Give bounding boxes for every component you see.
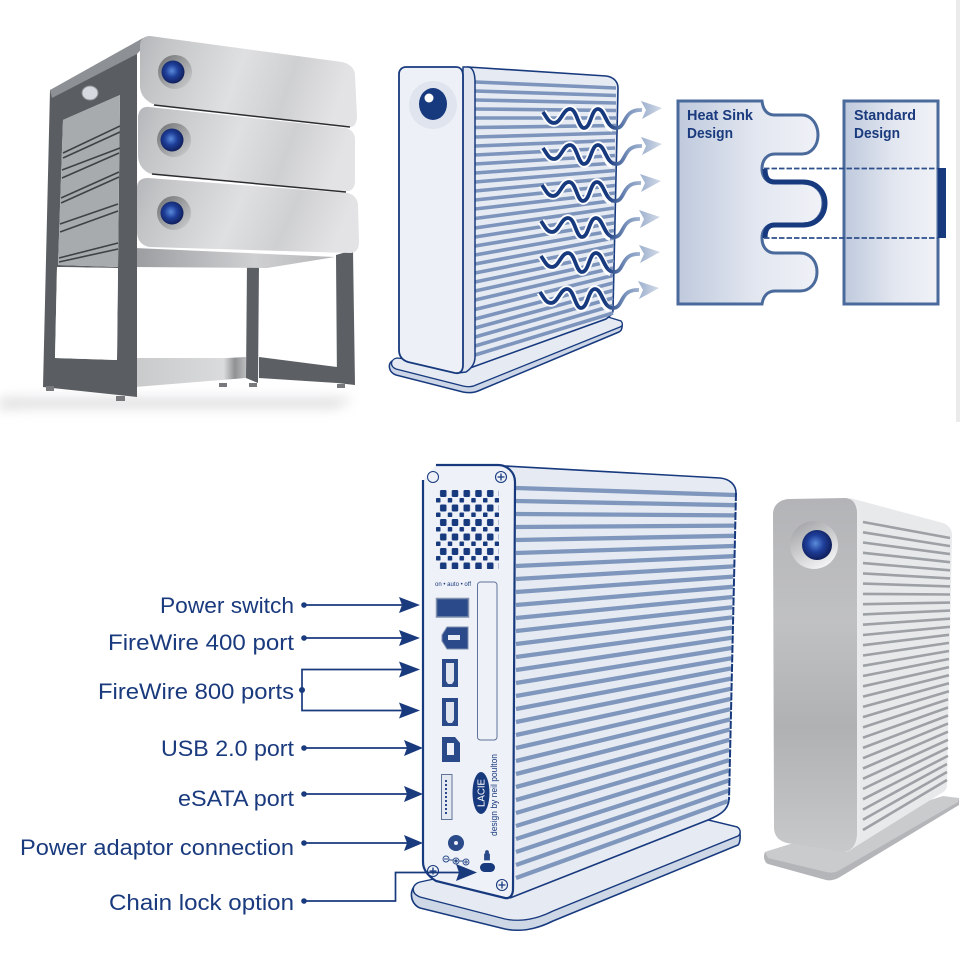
frame feet — [46, 383, 345, 401]
shoulder highlight — [845, 498, 861, 852]
middle drive — [138, 107, 355, 191]
standard design contact bar — [938, 168, 946, 238]
bottom drive — [137, 178, 359, 253]
label: FireWire 400 port — [108, 630, 420, 655]
label: eSATA port — [178, 786, 423, 811]
dashed guide lines — [764, 168, 938, 238]
polarity symbol — [443, 856, 469, 865]
power adaptor socket — [448, 835, 464, 851]
side outline — [505, 466, 736, 493]
base plate top — [765, 796, 959, 873]
standard design label: Standard — [854, 108, 916, 124]
fins — [475, 82, 616, 355]
label: power adaptor connection — [20, 835, 423, 860]
label: USB 2.0 port: USB 2.0 port — [161, 736, 295, 761]
front LED knob — [409, 81, 457, 129]
bottom knob — [157, 196, 191, 230]
front face — [399, 67, 463, 373]
top drive — [140, 36, 357, 127]
expansion slot cover — [478, 582, 497, 740]
bottom right screw — [496, 880, 508, 890]
base plate — [411, 820, 740, 930]
bottom left screw — [428, 866, 438, 876]
power switch — [436, 598, 468, 617]
thick conduction path — [765, 169, 825, 238]
label: chain lock option — [109, 864, 477, 915]
LaCie logo — [472, 772, 490, 814]
top right screw — [496, 472, 506, 482]
LaCie badge — [82, 86, 98, 100]
frame lower opening — [55, 267, 118, 360]
illustration: drive with heat flow — [389, 67, 662, 393]
label: power adaptor connection: Power adaptor connection — [20, 835, 294, 860]
heat sink design panel — [678, 101, 823, 304]
heat wave arrows — [540, 101, 662, 308]
top knob — [158, 55, 192, 89]
standard design panel — [844, 101, 938, 304]
lock icon — [484, 850, 490, 860]
label: chain lock option: Chain lock option — [109, 890, 294, 915]
chain lock slot — [480, 863, 495, 872]
photo: LaCie d2 drive — [764, 498, 959, 880]
ventilation mesh — [436, 490, 499, 569]
base plate side — [764, 797, 959, 880]
side body — [847, 498, 952, 852]
silver lower plate — [135, 357, 246, 387]
LaCie logo: LACIE — [476, 779, 488, 807]
top left screw partial — [428, 472, 438, 482]
label: power switch — [160, 593, 420, 618]
front face — [773, 498, 857, 852]
label: eSATA port: eSATA port — [178, 786, 295, 811]
rear frame legs — [246, 250, 355, 385]
eSATA port — [442, 774, 452, 820]
switch legend: on • auto • off — [435, 581, 471, 588]
port labels and arrows — [20, 593, 477, 915]
floor shadow — [0, 398, 355, 410]
FireWire 800 port bottom — [442, 698, 458, 726]
right edge strip — [956, 0, 960, 422]
photo: three stacked LaCie drives in a metal frame — [0, 36, 359, 410]
frame top slab — [50, 38, 150, 98]
FireWire 400 port — [442, 627, 468, 649]
fins — [516, 488, 735, 878]
standard design label: Design — [854, 126, 900, 142]
underside of drives — [133, 248, 335, 268]
heat sink side body — [468, 67, 618, 368]
blue knob — [802, 530, 832, 560]
side bottom outline — [510, 800, 729, 898]
side body — [505, 466, 736, 898]
drive seams — [152, 105, 350, 192]
knob surround — [790, 521, 838, 569]
label: FireWire 800 ports: FireWire 800 ports — [98, 679, 294, 704]
rear panel — [423, 465, 515, 898]
label: USB 2.0 port — [161, 736, 423, 761]
side heat-sink slats — [58, 95, 120, 267]
heat sink design label: Design — [687, 126, 733, 142]
label: FireWire 400 port: FireWire 400 port — [108, 630, 295, 655]
rear view illustration of the drive — [411, 465, 740, 930]
fin shadow lines — [863, 522, 950, 830]
base plate — [389, 317, 622, 393]
rounded shoulder — [458, 67, 475, 373]
scalloped right edge — [729, 493, 736, 800]
label: power switch: Power switch — [160, 593, 294, 618]
label: FireWire 800 ports — [98, 662, 420, 718]
designer credit: design by neil poulton — [489, 754, 500, 836]
FireWire 800 port top — [442, 659, 458, 687]
middle knob — [157, 123, 191, 157]
left frame plate — [43, 52, 137, 397]
heat sink design label: Heat Sink — [687, 108, 754, 124]
USB 2.0 port — [442, 737, 460, 762]
diagram: heat sink vs standard design — [678, 101, 946, 304]
